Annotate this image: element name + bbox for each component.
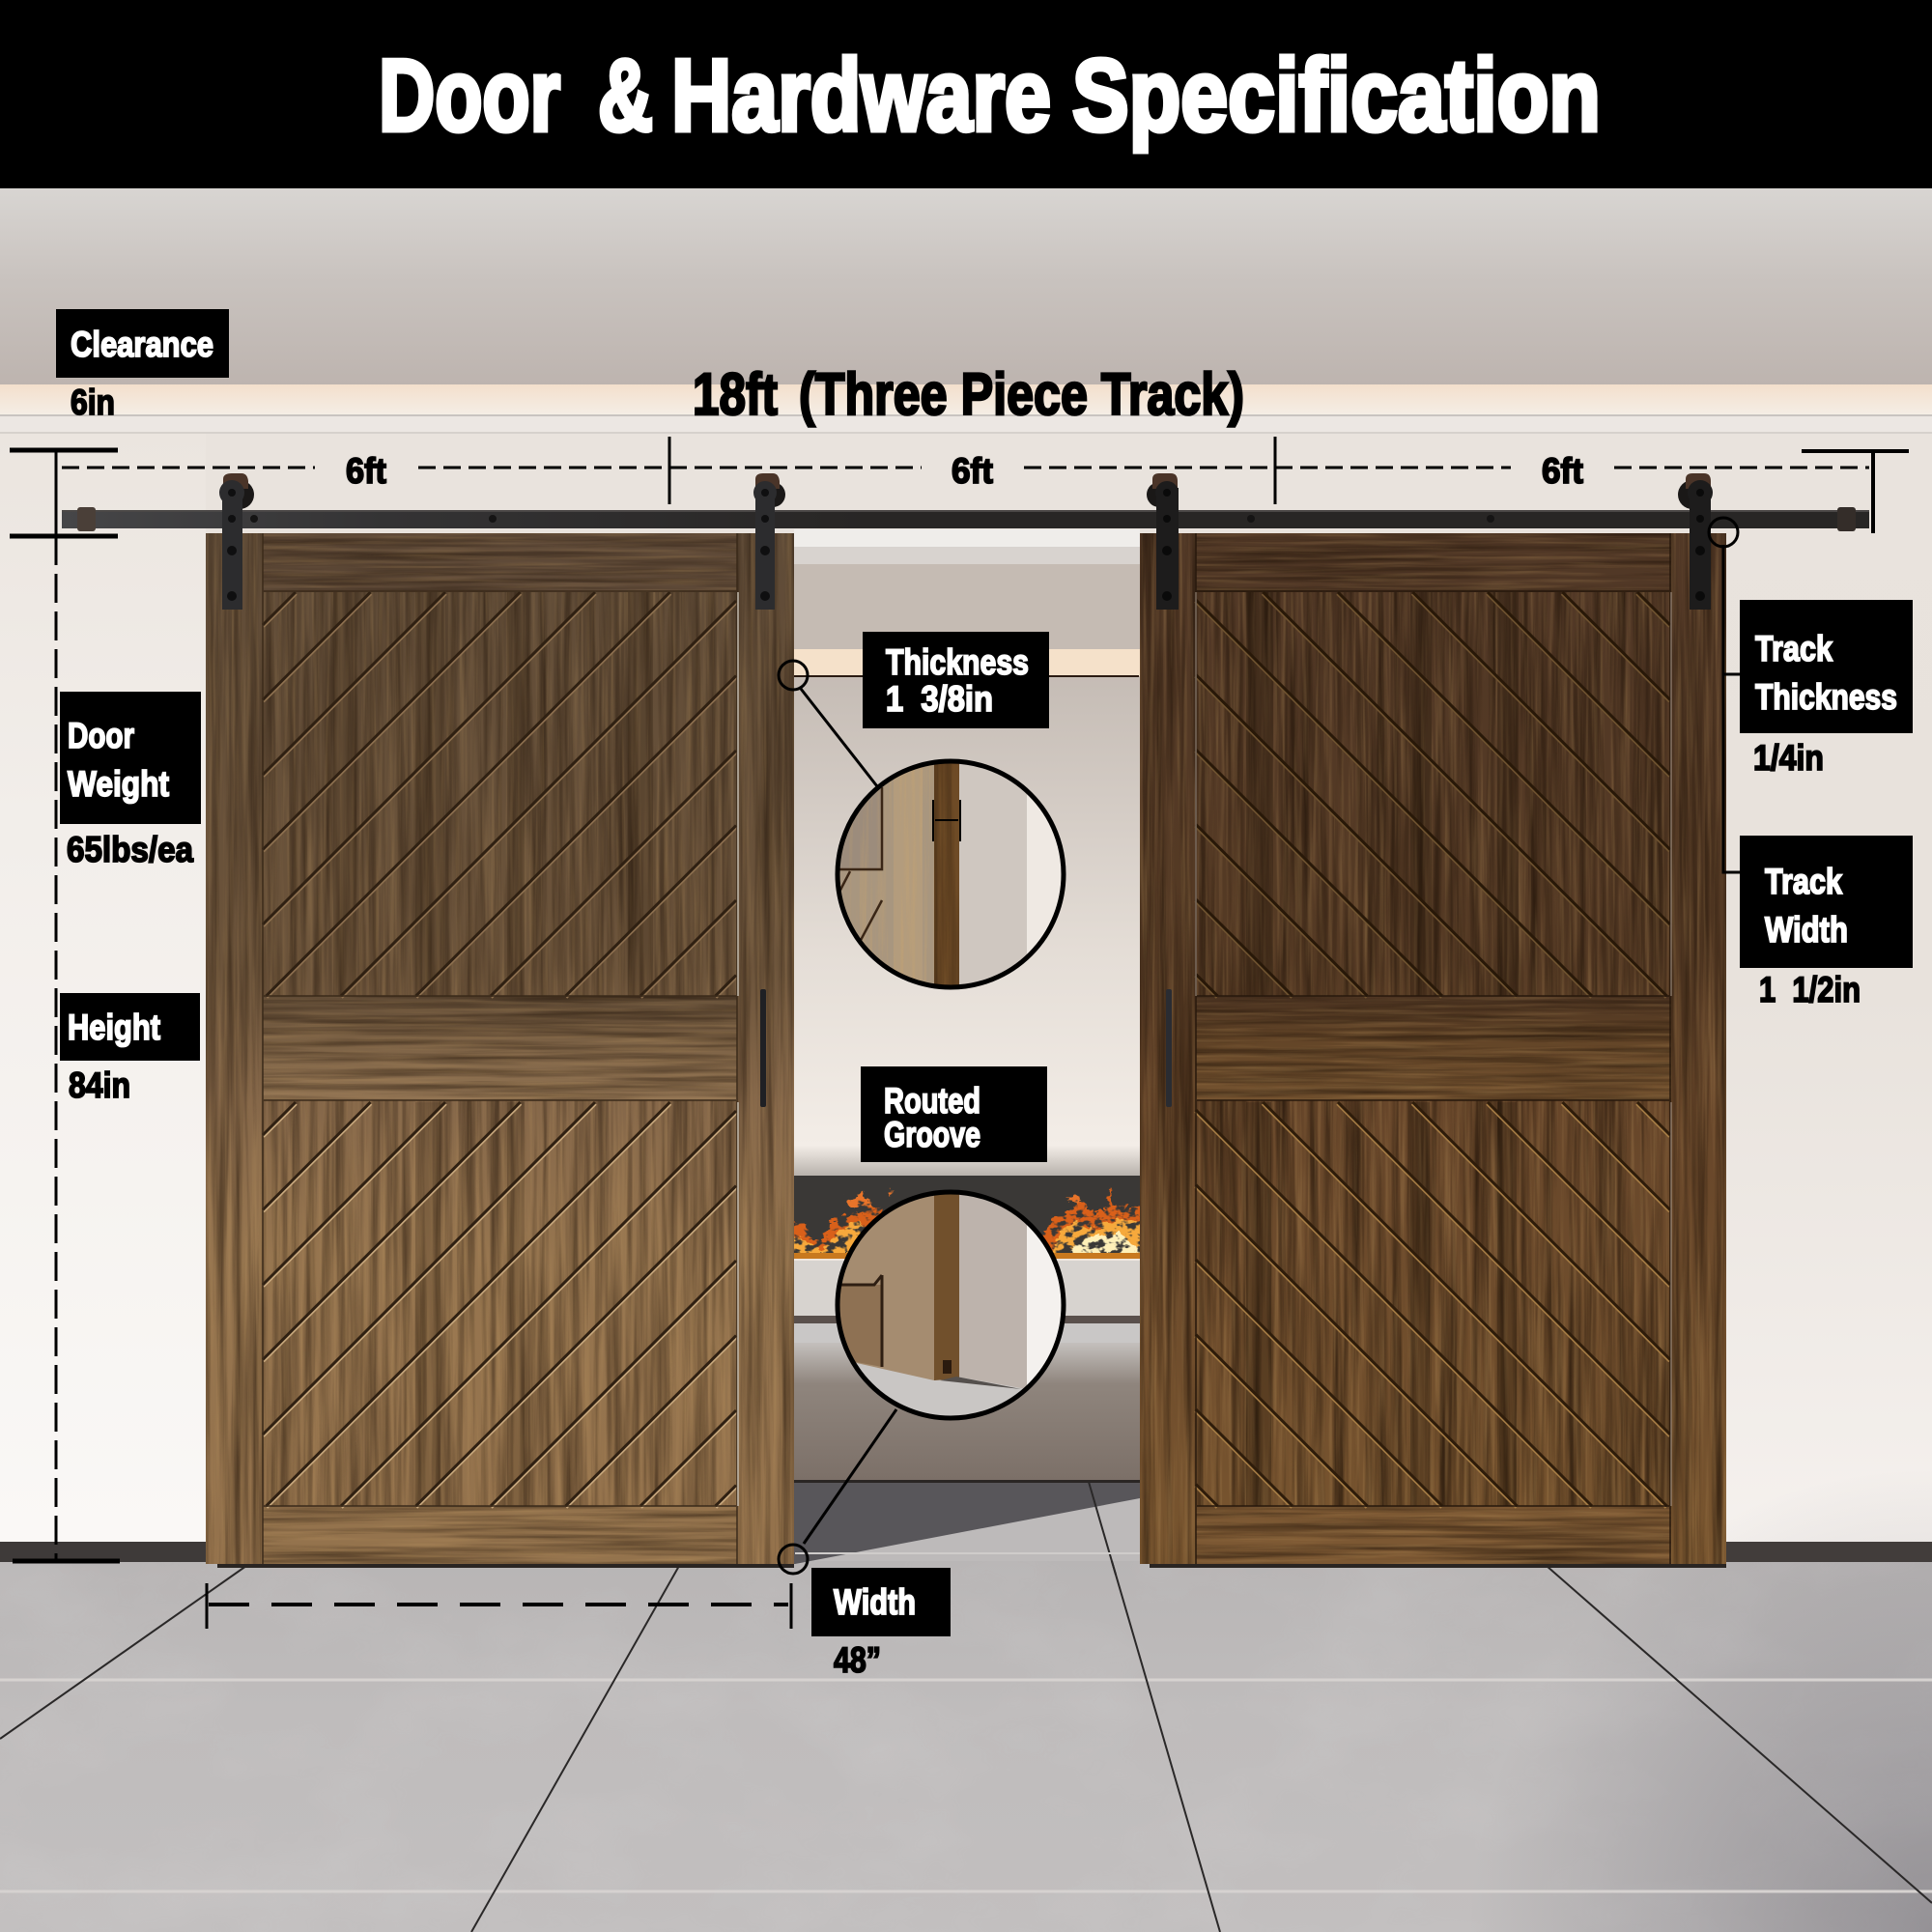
- left wall: [0, 434, 206, 1545]
- right door rails: [1196, 533, 1671, 1564]
- barn door track: [62, 507, 1869, 531]
- floor: [0, 1468, 1932, 1932]
- title: &: [598, 39, 653, 153]
- fireplace band: [794, 1176, 1140, 1255]
- left door: [206, 533, 794, 1568]
- routed groove label: Routed: [884, 1081, 980, 1121]
- track length heading: 18ft: [693, 361, 778, 427]
- track thickness label: Track: [1755, 629, 1833, 668]
- height dashed dimension: [13, 536, 120, 1561]
- hanger 3: [1147, 473, 1179, 610]
- height value: 84in: [69, 1065, 130, 1105]
- clearance label: [56, 309, 229, 378]
- track width label: Track: [1765, 862, 1842, 901]
- title: Door: [379, 39, 560, 153]
- segment label 3: 6ft: [1542, 451, 1583, 491]
- track length heading: (Three Piece Track): [799, 361, 1244, 427]
- hanger 2: [753, 473, 785, 610]
- track thickness label: Thickness: [1755, 677, 1897, 717]
- hanger 1: [219, 473, 254, 610]
- left door seams: [263, 533, 737, 1564]
- door weight label: Weight: [68, 764, 169, 804]
- door weight label: Door: [68, 716, 134, 755]
- left door rails: [263, 533, 737, 1564]
- right door seams: [1196, 533, 1670, 1564]
- background room seen between the doors: [787, 529, 1150, 1575]
- opening floor with shadow: [794, 1483, 1140, 1561]
- routed groove label: [861, 1066, 1047, 1162]
- segment label 2: 6ft: [952, 451, 993, 491]
- floor tile joints: [0, 1482, 1932, 1932]
- thickness callout leader lines: [779, 661, 1139, 786]
- ceiling: [0, 188, 1932, 384]
- width label: Width: [834, 1582, 916, 1622]
- right door diagonal grooves: [1195, 592, 1670, 1508]
- clearance label: Clearance: [71, 325, 213, 364]
- header banner: [0, 0, 1932, 188]
- ceiling light strip: [0, 384, 1932, 415]
- right door: [1140, 533, 1726, 1568]
- right wall: [1726, 434, 1932, 1545]
- thickness label: [863, 632, 1049, 728]
- hanger 4: [1678, 473, 1713, 610]
- magnifier: routed groove: [831, 1183, 1072, 1425]
- routed groove label: Groove: [884, 1115, 980, 1154]
- baseboards: [0, 1542, 1932, 1562]
- flames: [787, 1187, 1150, 1255]
- title: Hardware: [671, 39, 1051, 153]
- title: [379, 39, 1601, 153]
- track width value: 1 1/2in: [1759, 970, 1861, 1009]
- right track end bracket: [1802, 451, 1909, 533]
- track stoppers: [77, 507, 96, 531]
- track segment dimension lines: [62, 437, 1869, 504]
- track length heading: [693, 361, 1244, 427]
- height label: [60, 993, 200, 1061]
- track thickness label: [1740, 600, 1913, 733]
- track bolts: [250, 515, 1494, 523]
- segment label 1: 6ft: [346, 451, 386, 491]
- thickness measurement mark: [933, 800, 960, 841]
- height label: Height: [68, 1008, 160, 1047]
- width value: 48”: [834, 1640, 881, 1680]
- width leader line and marker: [779, 1409, 896, 1574]
- magnifier: door edge thickness: [831, 753, 1075, 995]
- track width label: Width: [1765, 910, 1848, 950]
- door weight value: 65lbs/ea: [67, 830, 193, 869]
- left door diagonal grooves: [263, 592, 737, 1508]
- width dashed dimension: [207, 1583, 791, 1629]
- left door handle: [760, 989, 766, 1107]
- right door dark board bands: [1246, 592, 1519, 1506]
- door weight label: [60, 692, 201, 824]
- track width label: [1740, 836, 1913, 968]
- left door dark board bands: [333, 592, 653, 1506]
- clearance dimension bracket: [10, 450, 118, 536]
- clearance value: 6in: [71, 383, 115, 422]
- thickness label: 1 3/8in: [886, 679, 993, 719]
- crown molding: [0, 414, 1932, 434]
- right door handle: [1166, 989, 1172, 1107]
- track thickness value: 1/4in: [1753, 738, 1824, 778]
- title: Specification: [1072, 39, 1601, 153]
- track callout bracket: [1709, 518, 1740, 872]
- width label: [811, 1568, 951, 1636]
- upper wall: [206, 434, 1726, 534]
- thickness label: Thickness: [886, 642, 1029, 682]
